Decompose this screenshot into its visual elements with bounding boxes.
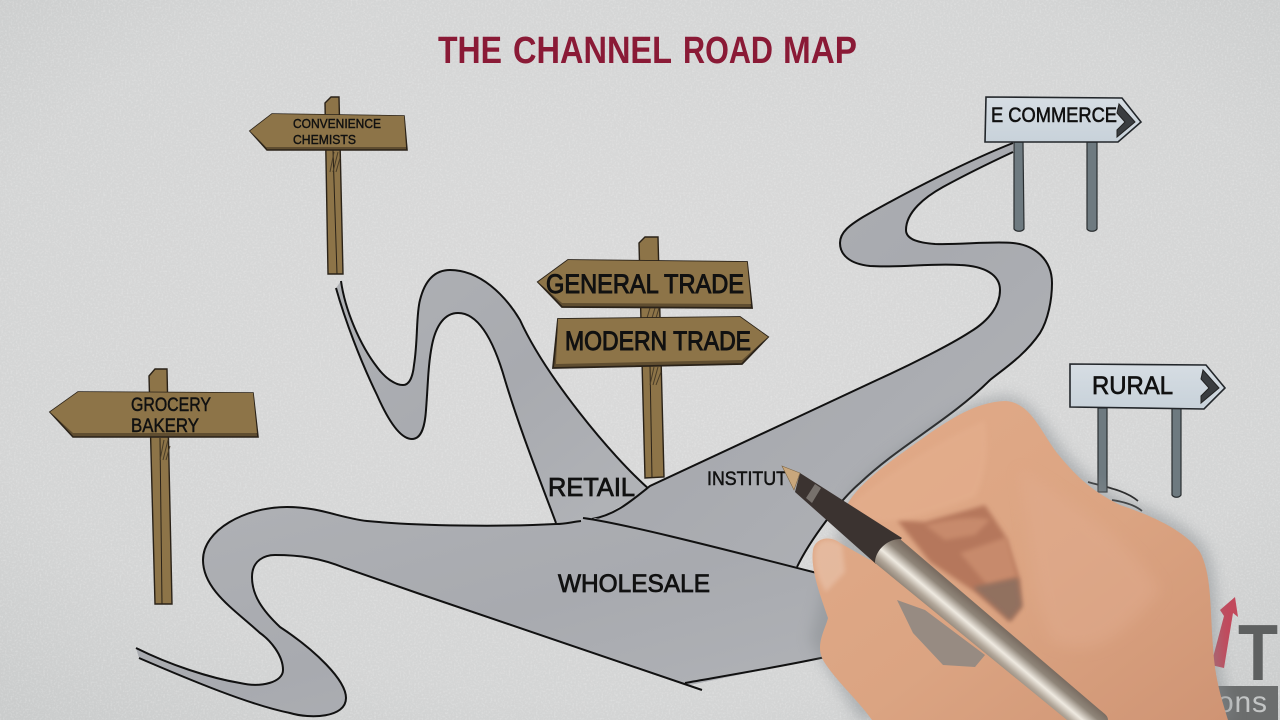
signpost: grocery bakery: GROCERY [131, 394, 211, 416]
pen barrel [875, 539, 1108, 720]
road: rural remnant [1088, 482, 1142, 511]
pen grip [795, 473, 902, 564]
pen nib [782, 466, 800, 490]
road network [136, 143, 1142, 716]
signpost: general trade and modern trade [538, 237, 768, 478]
signpost: grocery bakery [50, 369, 258, 604]
signpost: rural: RURAL [1092, 372, 1173, 400]
hand shadow [810, 396, 1234, 720]
finger shading [897, 505, 1022, 622]
hand [813, 401, 1228, 720]
signpost: convenience chemists [250, 97, 407, 274]
logo watermark [1211, 597, 1278, 720]
logo band text: ons [1217, 686, 1267, 719]
gap below pen [897, 600, 985, 667]
curled fingers [925, 518, 1017, 585]
sign: modern trade [553, 317, 768, 368]
signpost: rural [1070, 364, 1225, 497]
hand holding pen [782, 396, 1234, 720]
title: THE [438, 30, 502, 72]
sign: modern trade: MODERN TRADE [565, 326, 751, 356]
road label: retail: RETAIL [548, 472, 635, 502]
title: CHANNEL [513, 30, 672, 72]
signpost: e commerce [985, 97, 1141, 231]
back of hand highlight [1020, 470, 1160, 648]
title: MAP [783, 30, 857, 72]
title: ROAD [683, 30, 773, 72]
title [438, 30, 857, 72]
index finger highlight [850, 420, 987, 521]
gap above pen [973, 578, 1022, 621]
logo band [1215, 686, 1278, 720]
signpost: e commerce: E COMMERCE [991, 104, 1117, 127]
road: wholesale and grocery [136, 507, 900, 716]
thumb nail [815, 540, 845, 592]
sign: general trade [538, 260, 752, 308]
road: institutions and e-commerce [585, 143, 1052, 567]
road: retail [336, 270, 650, 523]
signpost: grocery bakery: BAKERY [131, 415, 199, 437]
road label: wholesale: WHOLESALE [558, 570, 710, 598]
sign: general trade: GENERAL TRADE [546, 269, 744, 299]
pen collar [806, 484, 821, 503]
signpost: convenience chemists: CHEMISTS [293, 133, 356, 147]
road label: institutions: INSTITUT [707, 469, 787, 490]
signpost: convenience chemists: CONVENIENCE [293, 117, 381, 131]
logo arrow [1211, 597, 1238, 668]
